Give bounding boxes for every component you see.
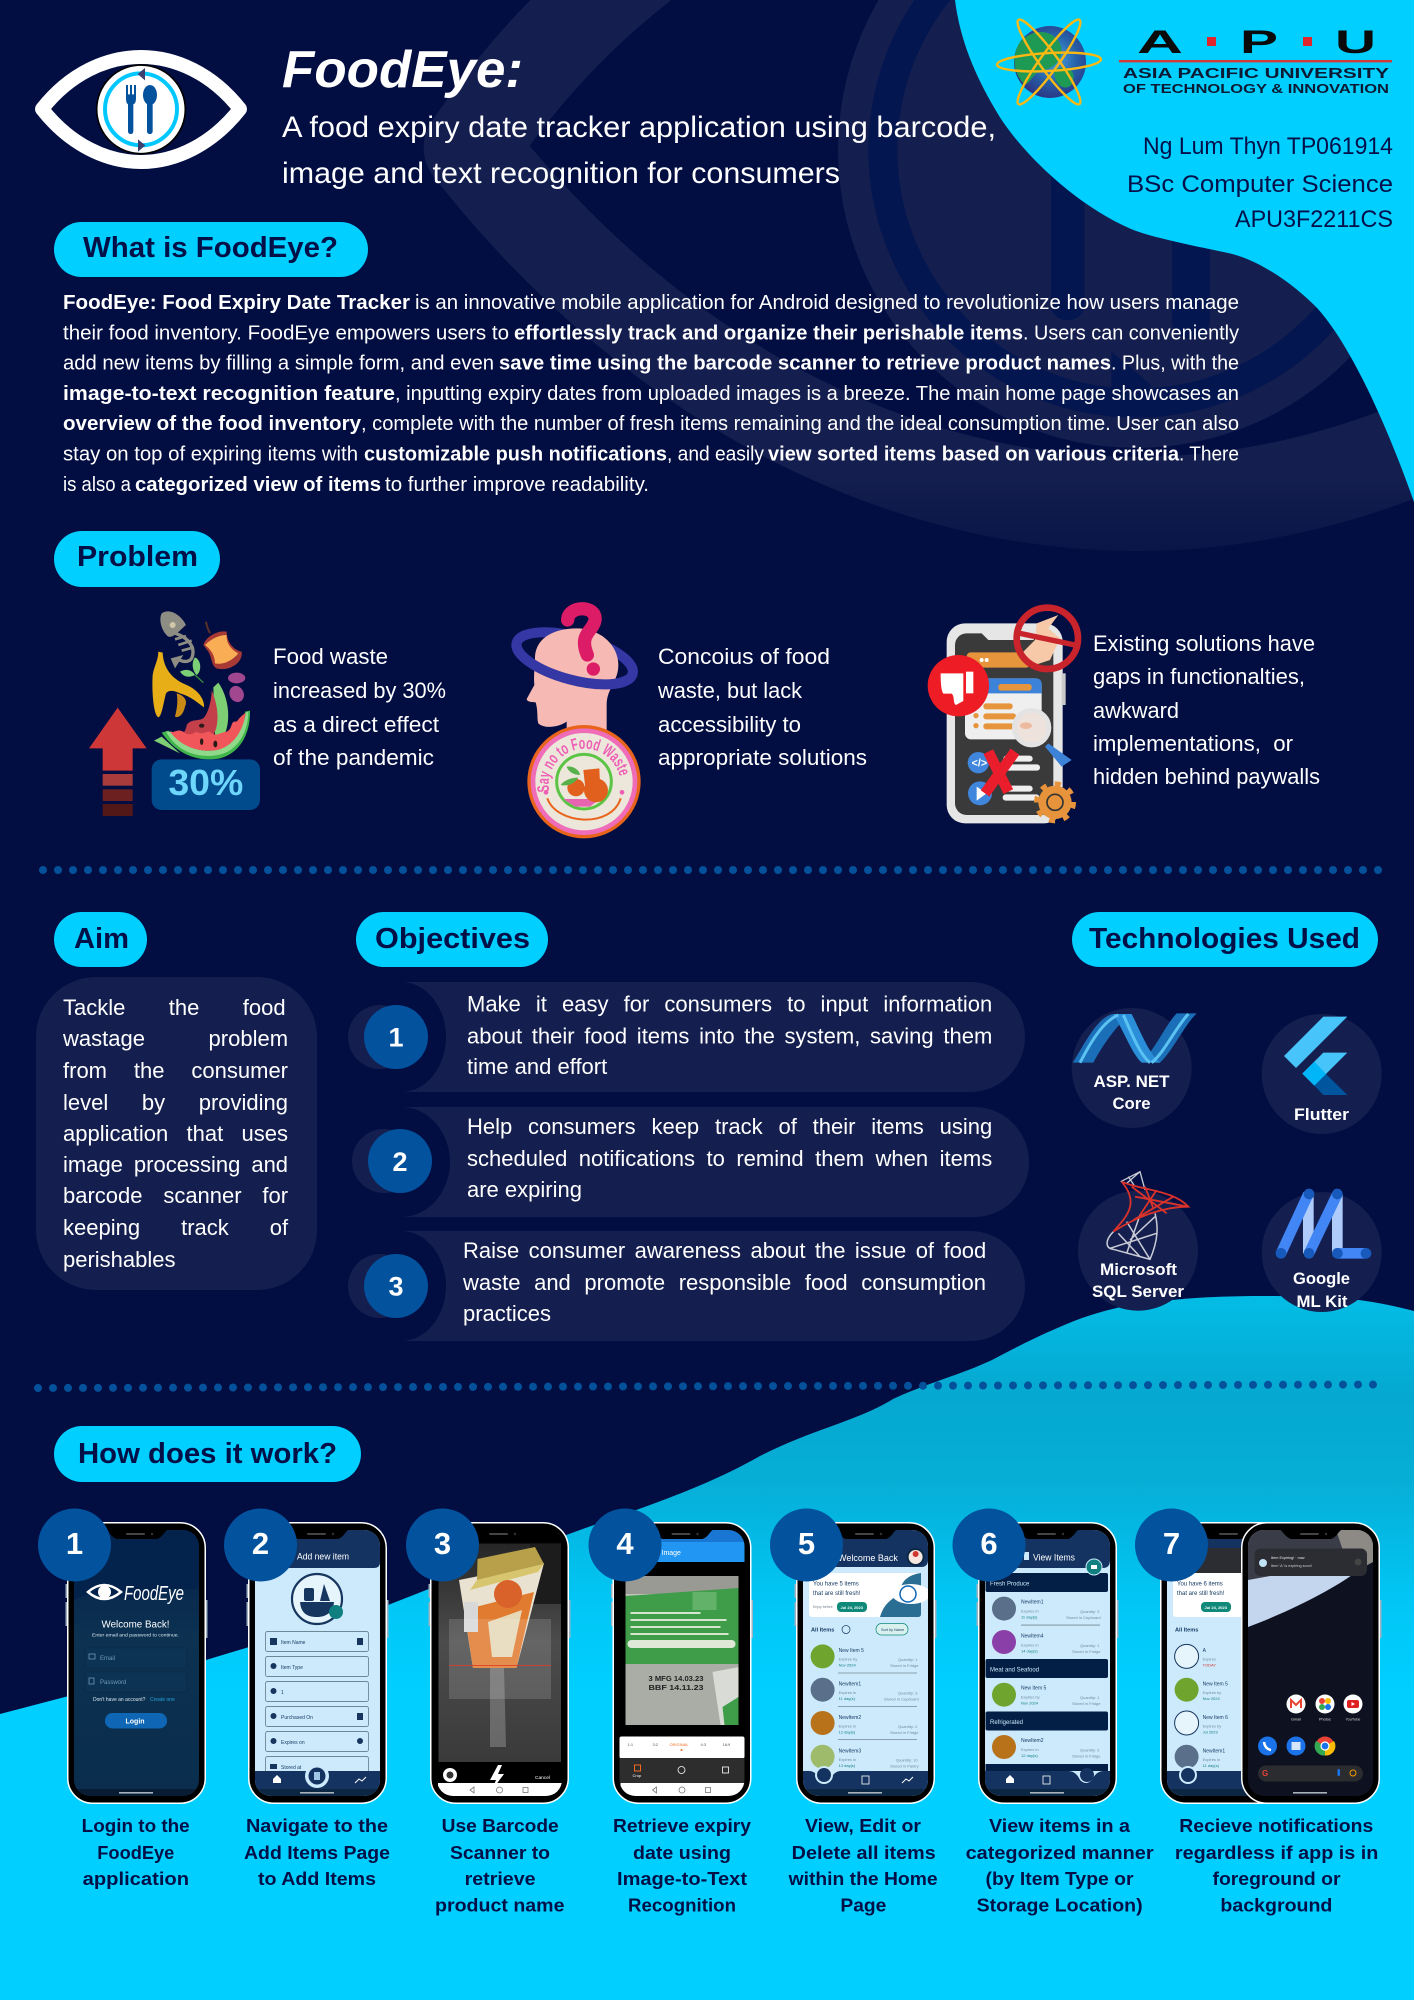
text block: description: , complete with the number of fresh items remaining and the ideal consumption time. User can also (361, 412, 1239, 435)
panel: objective 3: 3 (388, 1272, 404, 1302)
phone 5: home page: Quantity: 10 (896, 1758, 918, 1762)
phone 5: home page: 11 day(s) (839, 1696, 856, 1701)
text: food waste problem: increased by 30% (273, 678, 446, 703)
phone 4: image crop for expiry date: 1:1 (628, 1742, 634, 1747)
phone 2: add new item: Stored at (281, 1765, 302, 1771)
phone 4: image crop for expiry date: Image (662, 1550, 681, 1557)
tech: Google ML Kit (1262, 1189, 1382, 1312)
logo: APU wordmark: A (1137, 24, 1183, 60)
caption: step 7: foreground or (1212, 1868, 1340, 1889)
text: accessibility problem: accessibility to (658, 712, 801, 737)
phone 6: categorized view: Expires in (1021, 1608, 1039, 1614)
phone 5: home page: Expires by (839, 1656, 857, 1662)
phone 7 back: home page with notification: 11 day(s) (1203, 1763, 1220, 1768)
phone 5: home page: Stored in Pantry (890, 1764, 919, 1768)
phone 6: categorized view: Meat and Seafood (990, 1668, 1039, 1674)
text block: description: is an innovative mobile application for Android designed to revolutionize how users manage (415, 291, 1239, 314)
phone 4: image crop for expiry date: BBF 14.11.23 (648, 1685, 704, 1692)
heading: Objectives (356, 912, 548, 967)
phone 5: home page: Expires in (839, 1690, 856, 1695)
text block: description: view sorted items based on various criteria (768, 442, 1180, 466)
heading: Aim: Aim (74, 923, 129, 955)
tech: Flutter: Flutter (1294, 1105, 1349, 1124)
subtitle (282, 111, 996, 190)
heading: Problem (54, 531, 220, 587)
author details: APU3F2211CS (1235, 206, 1393, 233)
phone 5: home page: Stored in Fridge (890, 1730, 919, 1735)
caption: step 1: application (83, 1868, 189, 1889)
panel: objective 3: practices (463, 1301, 551, 1326)
step numbers: 4 (616, 1526, 634, 1561)
phone 5: home page: New Item 5 (839, 1648, 864, 1654)
phone 7 back: home page with notification: Nov 2024 (1203, 1696, 1220, 1701)
phone 7 back: home page with notification: Jul 24, 2023 (1204, 1605, 1228, 1610)
panel: aim: barcode scanner for (63, 1183, 288, 1208)
author details (1127, 133, 1393, 233)
text: food waste problem: of the pandemic (273, 745, 434, 770)
panel: objective 1: 1 (388, 1023, 404, 1053)
giant faded eye watermark (471, 0, 1414, 504)
phone 1: login screen: Welcome Back! (102, 1620, 170, 1630)
phone 6: categorized view: Stored in Cupboard (1066, 1615, 1101, 1620)
phone 6: categorized view: 11 day(s) (1021, 1614, 1038, 1620)
phone 2: add new item: Expires on (281, 1740, 305, 1746)
panel: aim (36, 977, 317, 1290)
author details: Ng Lum Thyn TP061914 (1143, 133, 1393, 160)
panel: objective 2: 2 (392, 1147, 408, 1177)
logo: APU wordmark: P (1240, 24, 1278, 60)
caption: step 3 (435, 1815, 564, 1916)
phone 6: categorized view: 12 day(s) (1021, 1753, 1038, 1758)
tech: Microsoft SQL Server: Microsoft (1100, 1260, 1177, 1279)
phone 4: image crop for expiry date: 4:3 (700, 1742, 707, 1747)
phone 5: home page: NewItem1 (839, 1682, 861, 1688)
caption: step 3: Use Barcode (442, 1815, 559, 1836)
caption: step 7: Recieve notifications (1179, 1815, 1373, 1836)
caption: step 4: Image-to-Text (617, 1868, 747, 1889)
phone 7 back: home page with notification: Expires (1203, 1656, 1216, 1662)
phone 5: home page: Welcome Back (838, 1553, 898, 1563)
phone 7 back: home page with notification: New Item 5 (1203, 1682, 1228, 1688)
text block: description: , and easily (667, 442, 765, 466)
caption: step 6 (966, 1815, 1154, 1916)
panel: objective 1 (348, 982, 1025, 1092)
phone 5: home page: You have 5 items (813, 1582, 859, 1588)
logo: APU wordmark: OF TECHNOLOGY & INNOVATION (1123, 82, 1389, 96)
text: existing solutions problem: implementations, or (1093, 731, 1293, 756)
phone 7 back: home page with notification: that are still fresh! (1177, 1591, 1225, 1597)
phone 5: home page: Stored in Fridge (890, 1663, 919, 1668)
text: existing solutions problem: hidden behind paywalls (1093, 764, 1320, 789)
watermark fade (0, 470, 1414, 580)
text block: description (63, 291, 1240, 496)
phone 5: home page: Enjoy before (813, 1605, 833, 1609)
phone 6: categorized view: Stored in Fridge (1072, 1701, 1101, 1706)
phone 4: image crop for expiry date: 3:2 (652, 1742, 659, 1747)
phone 6: categorized view: Expires in (1021, 1747, 1039, 1752)
icon: head with question mark and badge: Say no to Food Waste (537, 738, 628, 792)
phone 5: home page: 13 day(s) (839, 1763, 856, 1768)
text block: description: effortlessly track and organize their perishable items (514, 321, 1023, 344)
phone 6: categorized view: Nov 2024 (1021, 1700, 1039, 1706)
phone 5: home page: Stored in Cupboard (884, 1696, 919, 1702)
caption: step 4: Retrieve expiry (613, 1815, 752, 1836)
phone 6: categorized view: Quantity: 3 (1080, 1609, 1100, 1614)
phone 2: add new item: Purchased On (281, 1715, 313, 1721)
tech: ASP.NET Core (1072, 1008, 1197, 1128)
icon: head with question mark and badge (511, 602, 641, 838)
step numbers (38, 1508, 1208, 1582)
phone 5: home page: NewItem3 (839, 1748, 861, 1754)
caption: step 1 (82, 1815, 190, 1889)
phone 7 back: home page with notification: Expires in (1203, 1757, 1220, 1762)
text: existing solutions problem: gaps in functionalties, (1093, 664, 1305, 689)
caption: step 3: Scanner to (450, 1842, 550, 1863)
text block: description: to further improve readability. (385, 473, 649, 496)
caption: step 6: View items in a (989, 1815, 1131, 1836)
phone 5: home page: Quantity: 3 (898, 1690, 918, 1696)
caption: step 5 (788, 1815, 938, 1916)
text block: description: is also a (63, 473, 132, 496)
caption: step 7 (1175, 1815, 1378, 1916)
logo: APU wordmark: ASIA PACIFIC UNIVERSITY (1123, 66, 1389, 82)
phone 7 back: home page with notification: Expires by (1203, 1690, 1221, 1695)
text block: description: add new items by filling a simple form, and even (63, 352, 494, 375)
icon: bad app phone (928, 608, 1078, 823)
phone 7 back: home page with notification: Jul 2023 (1203, 1730, 1218, 1734)
logo: APU globe (997, 15, 1101, 109)
phone 3: barcode scanner: Cancel (535, 1775, 550, 1781)
caption: step 1: Login to the (82, 1815, 190, 1836)
text: accessibility problem: Concoius of food (658, 644, 830, 669)
phone 4: image crop for expiry date (611, 1523, 753, 1803)
phone 7 back: home page with notification: You have 6 items (1177, 1582, 1223, 1588)
phone 4: image crop for expiry date: ORIGINAL (670, 1742, 689, 1747)
phone 1: login screen: Login (126, 1718, 145, 1726)
tech: Google ML Kit: Google (1293, 1269, 1350, 1288)
logo: APU wordmark: U (1335, 24, 1376, 60)
top-right cyan shape (955, 0, 1414, 502)
caption: step 2: Navigate to the (246, 1815, 388, 1836)
text block: description: . Plus, with the (1111, 352, 1239, 375)
phone 6: categorized view: New Item 5 (1021, 1686, 1047, 1692)
caption: step 3: product name (435, 1894, 564, 1916)
text block: description: , inputting expiry dates from uploaded images is a breeze. The main home page showcases an (395, 382, 1239, 405)
phone 2: add new item (246, 1523, 388, 1803)
phone 2: add new item: Item Name (281, 1640, 306, 1646)
heading: How does it work?: How does it work? (78, 1438, 337, 1470)
text block: description: overview of the food inventory (63, 412, 362, 435)
tech: Flutter (1262, 1014, 1382, 1134)
panel: aim: application that uses (63, 1121, 288, 1146)
text block: description: customizable push notifications (364, 442, 667, 466)
phone 7 front: home screen notification: G (1262, 1769, 1268, 1778)
step numbers: 3 (434, 1526, 451, 1561)
phone 7 back: home page with notification: New Item 6 (1203, 1715, 1228, 1721)
text block: description: FoodEye: Food Expiry Date Tracker (63, 291, 410, 314)
logo: FoodEye eye icon (42, 57, 240, 162)
phone 1: login screen: FoodEye (124, 1583, 184, 1605)
phone 4: image crop for expiry date: 16:9 (722, 1742, 731, 1747)
caption: step 3: retrieve (465, 1868, 536, 1889)
panel: aim: level by providing (63, 1090, 288, 1115)
phone 6: categorized view: Quantity: 1 (1080, 1695, 1100, 1700)
phone 6: categorized view: Expires by (1021, 1694, 1040, 1700)
panel: objective 2: Help consumers keep track of their items using (467, 1114, 992, 1139)
phone 1: login screen: Create one (150, 1697, 175, 1703)
phone 5: home page: Nov 2024 (839, 1662, 856, 1668)
panel: objective 3: waste and promote responsible food consumption (462, 1270, 986, 1295)
phone 1: login screen: Don't have an account? (93, 1697, 146, 1703)
step numbers: 5 (798, 1526, 815, 1561)
phone 4: image crop for expiry date: Crop (632, 1773, 642, 1778)
subtitle: A food expiry date tracker application using barcode, (282, 111, 996, 144)
phone 5: home page: Expires in (839, 1724, 856, 1728)
text: food waste problem: Food waste (273, 644, 388, 669)
panel: objective 3 (348, 1231, 1025, 1341)
phone 6: categorized view: View Items (1033, 1552, 1075, 1562)
text block: description: . There (1179, 442, 1239, 466)
heading: Technologies Used (1072, 912, 1378, 967)
text block: description: their food inventory. FoodEye empowers users to (63, 321, 509, 344)
text: existing solutions problem: awkward (1093, 698, 1179, 723)
text: food waste problem: as a direct effect (273, 712, 439, 737)
phone 7 front: home screen notification: Photos (1319, 1718, 1331, 1722)
phone 1: login screen: Enter email and password to continue. (92, 1632, 179, 1638)
phone 5: home page (794, 1523, 936, 1803)
phone 5: home page: All Items (811, 1628, 834, 1634)
caption: step 5: Delete all items (792, 1842, 936, 1863)
panel: objective 3: Raise consumer awareness about the issue of food (463, 1238, 986, 1263)
phone 6: categorized view (976, 1523, 1118, 1803)
phone 7 back: home page with notification (1160, 1522, 1266, 1804)
phone 5: home page: Jul 24, 2023 (840, 1605, 864, 1610)
phone 7 front: home screen notification: Item 'A' is expiring soon! (1271, 1564, 1312, 1568)
text: food waste problem (273, 644, 446, 770)
caption: step 5: Page (840, 1894, 886, 1916)
phone 5: home page: that are still fresh! (813, 1591, 861, 1597)
phone 1: login screen (66, 1523, 208, 1803)
panel: aim: perishables (63, 1247, 176, 1272)
phone 5: home page: 12 day(s) (839, 1730, 856, 1734)
text: accessibility problem: waste, but lack (657, 678, 803, 703)
heading: Problem: Problem (77, 541, 198, 573)
caption: step 4 (613, 1815, 752, 1916)
text: existing solutions problem (1093, 631, 1320, 789)
title: FoodEye: (282, 41, 523, 99)
panel: objective 2: scheduled notifications to remind them when items (467, 1146, 992, 1171)
author details: BSc Computer Science (1127, 171, 1393, 198)
phone 2: add new item: Add new item (297, 1552, 349, 1562)
phone 6: categorized view: Quantity: 1 (1080, 1643, 1100, 1648)
phone 6: categorized view: NewItem4 (1021, 1634, 1044, 1640)
phone 7 front: home screen notification (1242, 1523, 1382, 1803)
caption: step 2 (244, 1815, 390, 1889)
tech: ASP.NET Core: Core (1112, 1094, 1150, 1113)
phone 1: login screen: Password (100, 1680, 126, 1686)
heading: Objectives: Objectives (375, 923, 530, 955)
text: existing solutions problem: Existing solutions have (1093, 631, 1315, 656)
panel: objective 1: time and effort (467, 1054, 607, 1079)
subtitle: image and text recognition for consumers (282, 157, 840, 190)
tech: Microsoft SQL Server: SQL Server (1092, 1282, 1184, 1301)
panel: objective 1: about their food items into the system, saving them (467, 1024, 992, 1048)
phone 7 back: home page with notification: All Items (1175, 1628, 1198, 1634)
tech: ASP.NET Core: ASP. NET (1094, 1072, 1170, 1091)
panel: objective 2 (352, 1107, 1029, 1217)
phone 6: categorized view: NewItem2 (1021, 1738, 1044, 1744)
caption: step 6: (by Item Type or (986, 1868, 1134, 1889)
phone 3: barcode scanner (428, 1523, 570, 1803)
caption: step 6: Storage Location) (977, 1894, 1143, 1916)
heading: Aim (54, 912, 147, 967)
text block: description: stay on top of expiring items with (63, 442, 358, 466)
step numbers: 1 (66, 1526, 83, 1561)
phone 7 back: home page with notification: TODAY (1203, 1662, 1216, 1668)
phone 7 front: home screen notification: YouTube (1346, 1718, 1360, 1722)
phone 5: home page: Quantity: 1 (898, 1657, 918, 1662)
phone 2: add new item: Item Type (281, 1665, 303, 1671)
phone 5: home page: Quantity: 2 (898, 1724, 918, 1729)
heading: How does it work? (54, 1426, 361, 1482)
caption: step 4: Recognition (628, 1894, 736, 1916)
panel: aim: wastage problem (62, 1026, 288, 1051)
text: accessibility problem (657, 644, 867, 770)
text: accessibility problem: appropriate solutions (658, 745, 867, 770)
tech: Google ML Kit: ML Kit (1296, 1292, 1348, 1311)
heading: Technologies Used: Technologies Used (1089, 923, 1360, 955)
phone 7 back: home page with notification: NewItem1 (1203, 1748, 1225, 1754)
phone 6: categorized view: Stored in Fridge (1072, 1754, 1101, 1758)
panel: aim: from the consumer (63, 1058, 288, 1083)
phone 4: image crop for expiry date: 3 MFG 14.03.23 (648, 1676, 704, 1683)
phone 7 front: home screen notification: Gmail (1291, 1718, 1301, 1722)
caption: step 5: within the Home (788, 1868, 938, 1889)
phone 6: categorized view: 14 day(s) (1021, 1648, 1038, 1654)
phone 6: categorized view: Refrigerated (990, 1720, 1023, 1726)
heading: What is FoodEye? (54, 222, 368, 277)
panel: aim: Tackle the food (63, 995, 286, 1020)
panel: objective 1: Make it easy for consumers to input information (467, 992, 992, 1016)
caption: step 7: background (1220, 1894, 1332, 1916)
logo: APU wordmark (1119, 24, 1392, 96)
phone 6: categorized view: Expires in (1021, 1642, 1039, 1648)
phone 5: home page: Sort by Name (881, 1628, 904, 1632)
icon: bad app phone: </> (972, 758, 987, 770)
phone 7 front: home screen notification: Item Expiring! · now (1271, 1556, 1305, 1560)
icon: food waste 30%: 30% (168, 762, 243, 803)
phone 6: categorized view: Quantity: 2 (1080, 1748, 1100, 1752)
caption: step 6: categorized manner (966, 1842, 1154, 1863)
phone 6: categorized view: NewItem1 (1021, 1600, 1044, 1606)
caption: step 7: regardless if app is in (1175, 1842, 1378, 1863)
step numbers: 7 (1163, 1526, 1180, 1561)
panel: aim: keeping track of (63, 1215, 289, 1240)
phone 6: categorized view: Fresh Produce (990, 1582, 1030, 1588)
text block: description: save time using the barcode scanner to retrieve product names (499, 352, 1111, 375)
phone 2: add new item: 1 (281, 1690, 284, 1696)
tech: Microsoft SQL Server (1078, 1172, 1198, 1311)
panel: aim: image processing and (63, 1152, 288, 1177)
phone 5: home page: Expires in (839, 1757, 856, 1762)
phone 1: login screen: Email (100, 1656, 115, 1662)
caption: step 4: date using (633, 1842, 731, 1863)
caption: step 5: View, Edit or (805, 1815, 921, 1836)
step numbers: 6 (980, 1526, 998, 1561)
heading: What is FoodEye?: What is FoodEye? (83, 232, 338, 264)
caption: step 2: Add Items Page (244, 1842, 390, 1863)
panel: objective 2: are expiring (467, 1177, 582, 1202)
text block: description: . Users can conveniently (1023, 321, 1240, 344)
phone 7 back: home page with notification: A (1203, 1648, 1207, 1654)
bottom cyan wave (0, 1296, 1414, 2000)
phone 7 back: home page with notification: Expires by (1203, 1724, 1221, 1728)
text block: description: categorized view of items (135, 473, 381, 496)
phone 6: categorized view: Stored in Fridge (1072, 1649, 1101, 1654)
icon: food waste 30% (89, 611, 260, 816)
step numbers: 2 (252, 1526, 269, 1561)
phone 5: home page: NewItem2 (839, 1715, 861, 1721)
text block: description: image-to-text recognition feature (63, 382, 395, 405)
caption: step 1: FoodEye (97, 1842, 174, 1863)
caption: step 2: to Add Items (258, 1868, 376, 1889)
